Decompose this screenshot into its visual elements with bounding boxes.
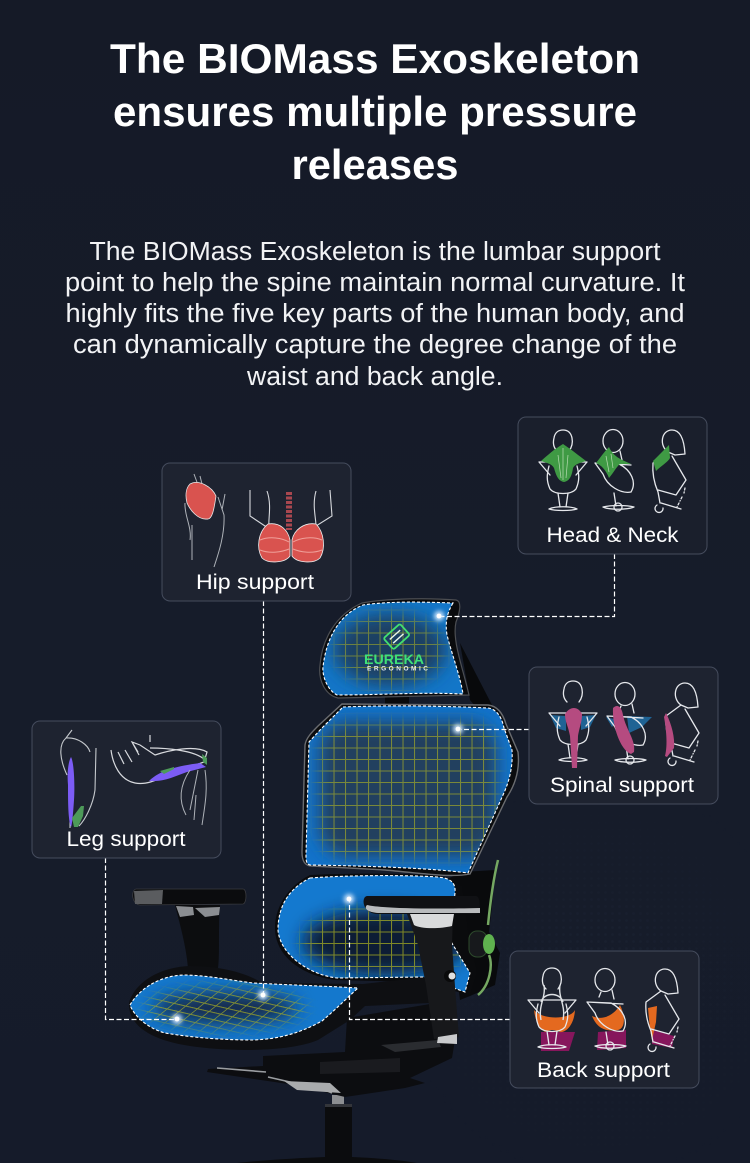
lumbar support xyxy=(275,874,477,995)
description text: can dynamically capture the degree change of the xyxy=(73,331,677,359)
label: Back support xyxy=(537,1058,670,1082)
connector: back xyxy=(350,901,510,1020)
right armrest xyxy=(364,896,480,1044)
logo: ERGONOMIC xyxy=(367,666,428,672)
description text: point to help the spine maintain normal curvature. It xyxy=(65,269,685,297)
headrest stem xyxy=(385,694,409,709)
description text: highly fits the five key parts of the human body, and xyxy=(66,300,684,328)
label: Head & Neck xyxy=(546,523,679,547)
title: releases xyxy=(292,141,458,188)
left armrest xyxy=(133,889,246,968)
panel: head and neck xyxy=(518,417,707,554)
description text: waist and back angle. xyxy=(246,363,503,391)
icon: back muscles xyxy=(528,968,679,1051)
label: Hip support xyxy=(196,570,314,594)
title: The BIOMass Exoskeleton xyxy=(110,35,640,82)
connector: hip xyxy=(262,601,264,993)
backrest xyxy=(300,700,520,880)
title xyxy=(110,35,640,188)
tilt knob xyxy=(469,931,495,957)
icon: neck muscles xyxy=(539,430,686,512)
description text: The BIOMass Exoskeleton is the lumbar support xyxy=(90,238,660,266)
headrest xyxy=(320,599,470,700)
description text xyxy=(65,238,685,391)
panel: back support xyxy=(510,951,699,1088)
connector: head and neck xyxy=(441,554,614,616)
logo: EUREKA xyxy=(364,651,424,667)
title: ensures multiple pressure xyxy=(113,88,637,135)
seat xyxy=(129,966,430,1050)
connector: spinal xyxy=(461,728,529,730)
panel: spinal support xyxy=(529,667,718,804)
logo xyxy=(364,624,428,672)
chair xyxy=(129,599,520,1163)
rear spine and green trim xyxy=(445,860,500,1000)
icon: spine muscles xyxy=(549,681,699,768)
seat mechanism xyxy=(207,1004,455,1097)
label: Leg support xyxy=(66,827,186,851)
base and column xyxy=(237,1095,417,1163)
icon: leg muscles xyxy=(61,730,207,828)
marker dots xyxy=(172,611,463,1024)
icon: gluteal muscles xyxy=(185,474,332,567)
connector: leg xyxy=(106,858,175,1020)
label: Spinal support xyxy=(550,773,694,797)
headrest strut xyxy=(460,643,492,712)
panel: leg support xyxy=(32,721,221,858)
panel: hip support xyxy=(162,463,351,601)
